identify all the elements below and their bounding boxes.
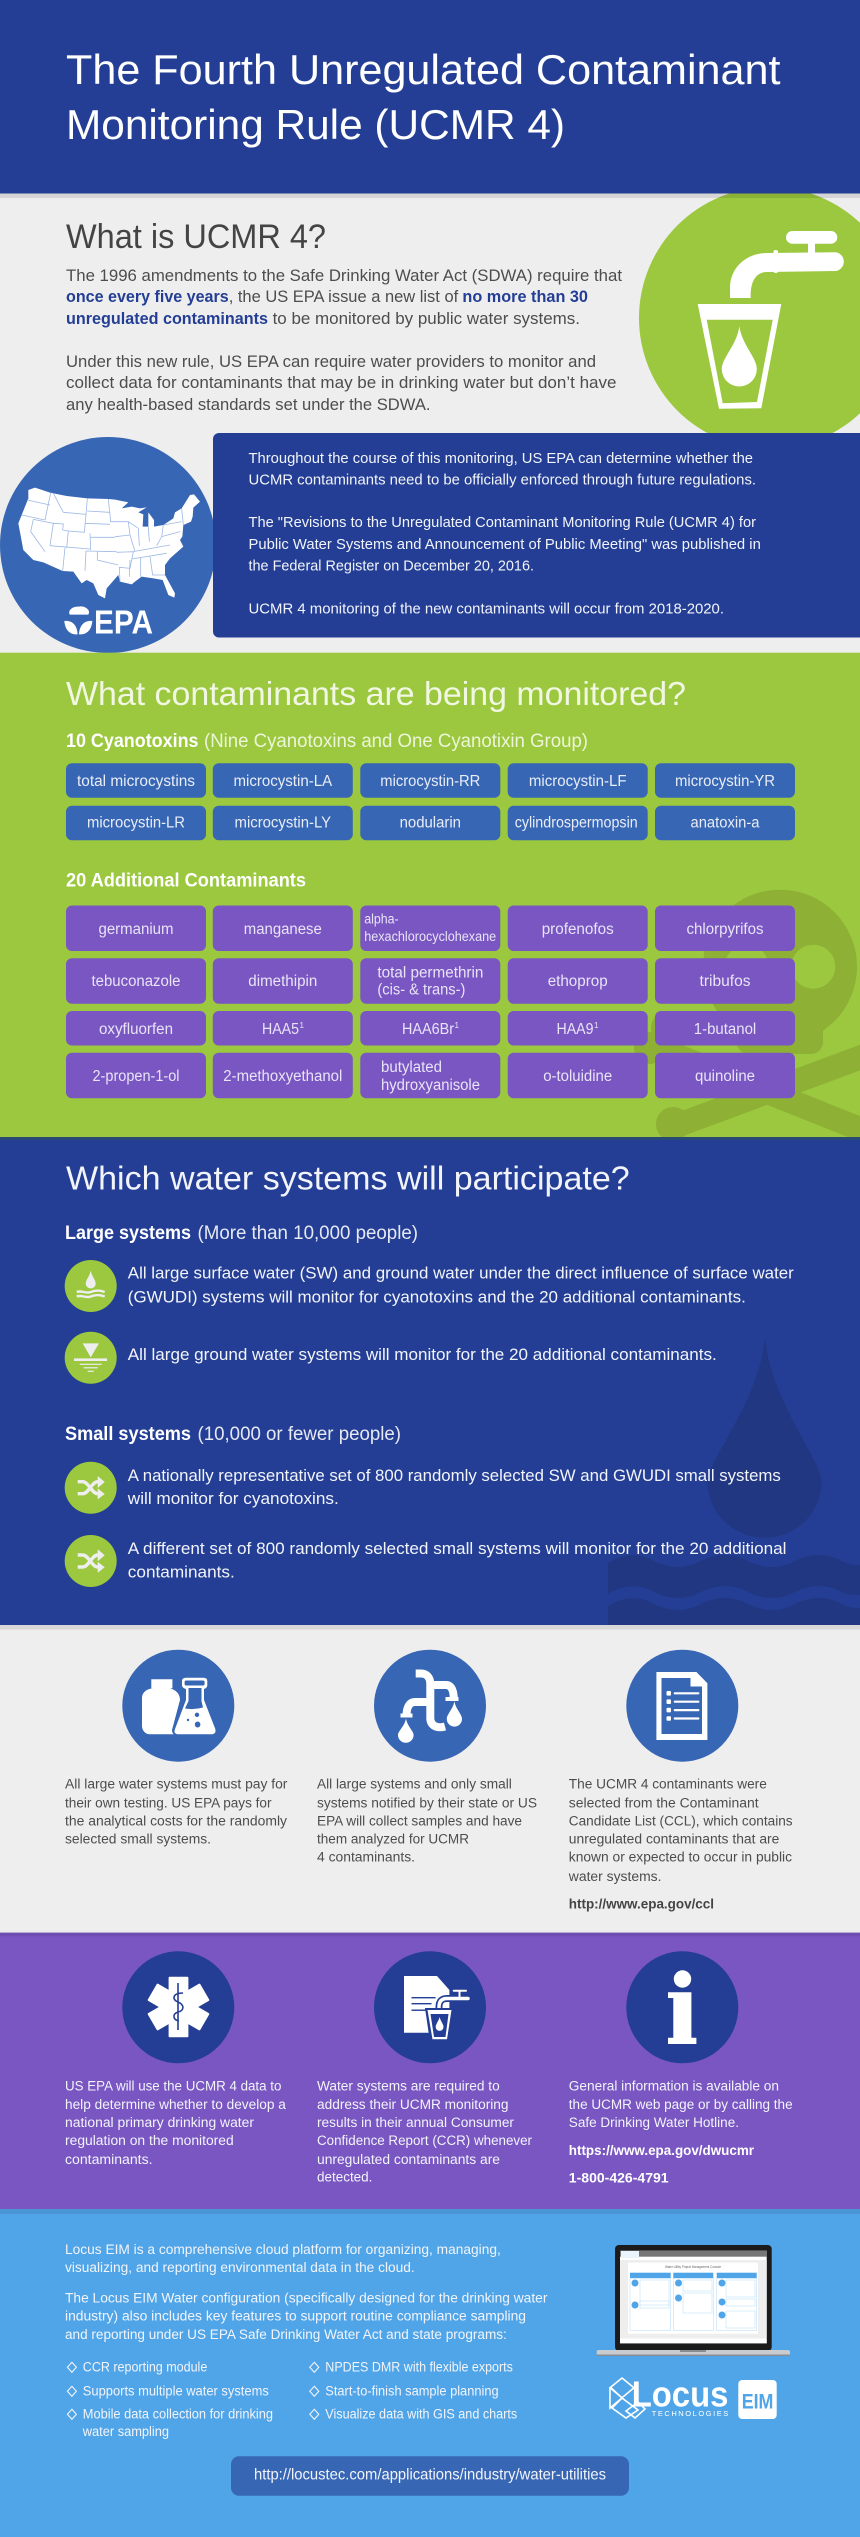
icon: US map and EPA logo on blue circle bbox=[0, 437, 216, 653]
image: laptop with Locus console: Water Utility Project Management Console bbox=[665, 2265, 721, 2269]
chips: cyanotoxins: microcystin-LA bbox=[233, 773, 333, 790]
text: consumer confidence report: address their UCMR monitoring bbox=[317, 2097, 508, 2113]
text: Locus EIM intro: The Locus EIM Water configuration (specifically designed for the drinking water bbox=[65, 2291, 548, 2307]
link button: water utilities bbox=[231, 2456, 629, 2496]
chips: cyanotoxins: anatoxin-a bbox=[690, 815, 760, 832]
text: consumer confidence report: results in their annual Consumer bbox=[317, 2115, 514, 2131]
chips: additional contaminants: oxyfluorfen bbox=[99, 1021, 173, 1038]
text: large surface water: (GWUDI) systems will monitor for cyanotoxins and the 20 additional contaminants. bbox=[128, 1289, 746, 1307]
text: testing costs: their own testing. US EPA pays for bbox=[65, 1796, 272, 1812]
chips: cyanotoxins bbox=[66, 763, 795, 840]
text: small systems cyanotoxins bbox=[127, 1467, 781, 1508]
text: consumer confidence report: Confidence Report (CCR) whenever bbox=[317, 2133, 532, 2149]
text: contaminant candidate list: water systems. bbox=[568, 1869, 662, 1885]
icon: shuffle bbox=[65, 1462, 117, 1514]
chips: additional contaminants: ethoprop bbox=[548, 973, 608, 990]
panel: what is UCMR 4 bbox=[0, 187, 860, 653]
text: testing costs: selected small systems. bbox=[65, 1832, 211, 1848]
chips: additional contaminants: HAA9 bbox=[556, 1021, 594, 1038]
text: consumer confidence report: unregulated contaminants are bbox=[317, 2152, 500, 2168]
text: who collects samples: 4 contaminants. bbox=[317, 1850, 415, 1866]
text: contaminant candidate list: http://www.epa.gov/ccl bbox=[569, 1897, 714, 1913]
text: Locus EIM intro: and reporting under US EPA Safe Drinking Water Act and state programs: bbox=[65, 2327, 507, 2343]
text: general information bbox=[569, 2079, 793, 2187]
text: general information: General information is available on bbox=[569, 2079, 779, 2095]
text: Locus EIM intro: visualizing, and reporting environmental data in the cloud. bbox=[65, 2260, 415, 2276]
chips: cyanotoxins: microcystin-LR bbox=[87, 815, 185, 832]
chips: cyanotoxins: microcystin-YR bbox=[675, 773, 775, 790]
text: who collects samples: EPA will collect samples and have bbox=[317, 1814, 522, 1830]
list: features: water sampling bbox=[82, 2424, 169, 2440]
chips: additional contaminants: alpha- bbox=[364, 911, 399, 926]
chips: additional contaminants: total permethrin bbox=[377, 964, 483, 981]
text: who collects samples: systems notified by their state or US bbox=[317, 1796, 537, 1812]
text: who collects samples: them analyzed for UCMR bbox=[317, 1832, 469, 1848]
text: contaminant candidate list: The UCMR 4 contaminants were bbox=[569, 1777, 767, 1793]
chips: additional contaminants: 2-methoxyethanol bbox=[223, 1068, 342, 1085]
text block: rule paragraph: any health-based standards set under the SDWA. bbox=[66, 396, 430, 414]
chips: cyanotoxins: microcystin-RR bbox=[380, 773, 480, 790]
text: contaminant candidate list: selected from the Contaminant bbox=[569, 1796, 759, 1812]
icon: US map and EPA logo on blue circle: EPA bbox=[94, 604, 153, 640]
text: small systems cyanotoxins: A nationally representative set of 800 randomly selected SW and GWUDI small systems bbox=[128, 1467, 781, 1485]
text: consumer confidence report bbox=[317, 2079, 532, 2186]
text block: intro paragraph: no more than 30 bbox=[462, 288, 588, 306]
panel: monitoring details: Public Water Systems and Announcement of Public Meeting" was published in bbox=[248, 537, 761, 553]
chips: additional contaminants: dimethipin bbox=[248, 973, 317, 990]
subheading: cyanotoxins: (Nine Cyanotoxins and One Cyanotixin Group) bbox=[204, 731, 588, 752]
list: features: NPDES DMR with flexible exports bbox=[325, 2360, 513, 2376]
text: testing costs bbox=[65, 1777, 288, 1848]
panel: monitoring details bbox=[213, 433, 860, 638]
panel: monitoring details: UCMR 4 monitoring of the new contaminants will occur from 2018-2020. bbox=[248, 602, 724, 618]
text: Locus EIM intro: industry) also includes key features to support routine compliance sampling bbox=[65, 2309, 526, 2325]
list: features: Start-to-finish sample planning bbox=[325, 2384, 499, 2400]
chips: additional contaminants: HAA6Br bbox=[402, 1021, 454, 1038]
text block: intro paragraph bbox=[66, 267, 622, 328]
panel: monitoring details: The "Revisions to the Unregulated Contaminant Monitoring Rule (UCMR 4) for bbox=[248, 515, 756, 531]
icon: report with faucet and glass bbox=[374, 1951, 486, 2063]
subheading: additional contaminants: 20 Additional Contaminants bbox=[66, 871, 306, 892]
icon: document checklist bbox=[626, 1650, 738, 1762]
text: EPA use of data: US EPA will use the UCMR 4 data to bbox=[65, 2079, 282, 2095]
icon: pipes with drops bbox=[374, 1650, 486, 1762]
icon: star of life bbox=[122, 1951, 234, 2063]
list: features: Mobile data collection for drinking bbox=[83, 2407, 273, 2423]
icon: ground water bbox=[65, 1332, 117, 1384]
chips: additional contaminants: hexachlorocyclohexane bbox=[364, 929, 496, 944]
panel: monitoring details: the Federal Register on December 20, 2016. bbox=[248, 558, 534, 574]
text: who collects samples: All large systems and only small bbox=[317, 1777, 512, 1793]
subheading: small systems: Small systems bbox=[65, 1424, 191, 1445]
title: Monitoring Rule (UCMR 4) bbox=[66, 101, 565, 148]
text: testing costs: All large water systems must pay for bbox=[65, 1777, 288, 1793]
chips: additional contaminants: tribufos bbox=[700, 973, 751, 990]
list: features: Visualize data with GIS and charts bbox=[325, 2407, 517, 2423]
panel: which water systems will participate bbox=[0, 1137, 860, 1625]
icon: water drop and waves watermark bbox=[608, 1337, 860, 1625]
text: consumer confidence report: Water systems are required to bbox=[317, 2079, 500, 2095]
text: contaminant candidate list: known or expected to occur in public bbox=[569, 1850, 792, 1866]
icon: information bbox=[626, 1951, 738, 2063]
chips: additional contaminants: o-toluidine bbox=[543, 1068, 612, 1085]
text: large surface water bbox=[128, 1265, 794, 1307]
chips: additional contaminants: 1-butanol bbox=[694, 1021, 756, 1038]
panel: contaminants being monitored bbox=[0, 653, 860, 1141]
chips: additional contaminants: tebuconazole bbox=[92, 973, 180, 990]
text: contaminant candidate list bbox=[568, 1777, 793, 1913]
chips: cyanotoxins: nodularin bbox=[400, 815, 461, 832]
text: general information: 1-800-426-4791 bbox=[569, 2171, 669, 2187]
icon: faucet and glass on green circle bbox=[639, 187, 860, 449]
title: The Fourth Unregulated Contaminant bbox=[66, 46, 781, 93]
subheading: large systems: (More than 10,000 people) bbox=[198, 1223, 418, 1244]
text: EPA use of data: regulation on the monitored bbox=[65, 2133, 234, 2149]
text: large surface water: All large surface water (SW) and ground water under the direct influence of surface water bbox=[128, 1265, 794, 1283]
chips: cyanotoxins: microcystin-LY bbox=[235, 815, 331, 832]
chips: additional contaminants: chlorpyrifos bbox=[686, 921, 764, 938]
heading: contaminants: What contaminants are being monitored? bbox=[66, 675, 686, 712]
chips: additional contaminants: germanium bbox=[98, 921, 174, 938]
image: laptop with Locus console bbox=[597, 2245, 790, 2356]
chips: additional contaminants: 1 bbox=[594, 1021, 599, 1030]
text block: intro paragraph: The 1996 amendments to the Safe Drinking Water Act (SDWA) require that bbox=[66, 267, 622, 285]
panel: monitoring details: UCMR contaminants need to be officially enforced through future regulations. bbox=[248, 472, 756, 488]
chips: additional contaminants: 1 bbox=[300, 1021, 304, 1030]
panel: monitoring details: Throughout the course of this monitoring, US EPA can determine whether the bbox=[248, 451, 753, 467]
logo: EIM badge bbox=[738, 2380, 777, 2419]
text block: intro paragraph: to be monitored by public water systems. bbox=[273, 310, 580, 328]
chips: additional contaminants: quinoline bbox=[695, 1068, 755, 1085]
chips: cyanotoxins: total microcystins bbox=[77, 773, 195, 790]
text: small systems cyanotoxins: will monitor for cyanotoxins. bbox=[127, 1490, 339, 1508]
chips: additional contaminants bbox=[66, 906, 795, 1098]
subheading: large systems: Large systems bbox=[65, 1223, 191, 1244]
chips: additional contaminants: hydroxyanisole bbox=[381, 1077, 480, 1094]
subheading: small systems: (10,000 or fewer people) bbox=[198, 1424, 401, 1445]
panel: Locus EIM bbox=[0, 2209, 860, 2537]
icon: surface water bbox=[65, 1260, 117, 1312]
chips: additional contaminants: butylated bbox=[381, 1059, 442, 1076]
icon: skull and crossbones watermark bbox=[634, 890, 860, 1141]
text: consumer confidence report: detected. bbox=[317, 2170, 372, 2186]
text block: intro paragraph: unregulated contaminants bbox=[66, 310, 268, 328]
heading: what is UCMR 4: What is UCMR 4? bbox=[66, 218, 326, 256]
text: EPA use of data bbox=[65, 2079, 286, 2168]
icon: shuffle bbox=[65, 1535, 117, 1587]
text block: rule paragraph: Under this new rule, US EPA can require water providers to monitor and bbox=[66, 353, 596, 371]
logo: EIM badge: EIM bbox=[742, 2390, 773, 2413]
subheading: cyanotoxins: 10 Cyanotoxins bbox=[66, 731, 198, 752]
logo: Locus Technologies: TECHNOLOGIES bbox=[652, 2409, 728, 2418]
text: general information: https://www.epa.gov/dwucmr bbox=[569, 2143, 754, 2159]
heading: participation: Which water systems will participate? bbox=[66, 1159, 630, 1196]
subheading: large systems bbox=[65, 1223, 418, 1244]
chips: additional contaminants: profenofos bbox=[542, 921, 614, 938]
text: contaminant candidate list: unregulated contaminants that are bbox=[569, 1832, 779, 1848]
subheading: small systems bbox=[65, 1424, 401, 1445]
header banner bbox=[0, 0, 860, 194]
chips: additional contaminants: (cis- & trans-) bbox=[377, 981, 465, 998]
text block: rule paragraph bbox=[66, 353, 616, 414]
text: EPA use of data: contaminants. bbox=[65, 2152, 152, 2168]
text: EPA use of data: national primary drinking water bbox=[65, 2115, 254, 2131]
text: small systems additional contaminants: contaminants. bbox=[128, 1564, 235, 1582]
text: testing costs: the analytical costs for the randomly bbox=[65, 1814, 288, 1830]
text: large ground water: All large ground water systems will monitor for the 20 additional contaminants. bbox=[128, 1346, 717, 1364]
panel: testing facts bbox=[0, 1625, 860, 1933]
chips: additional contaminants: 1 bbox=[454, 1021, 460, 1030]
text: general information: the UCMR web page or by calling the bbox=[569, 2097, 793, 2113]
list: features: CCR reporting module bbox=[83, 2360, 207, 2376]
text block: intro paragraph: , the US EPA issue a new list of bbox=[229, 288, 459, 306]
text: who collects samples bbox=[317, 1777, 537, 1866]
chips: additional contaminants: manganese bbox=[244, 921, 322, 938]
text: general information: Safe Drinking Water Hotline. bbox=[569, 2115, 739, 2131]
title bbox=[66, 46, 781, 148]
list: features bbox=[67, 2360, 517, 2440]
text: EPA use of data: help determine whether to develop a bbox=[65, 2097, 286, 2113]
list: features: Supports multiple water systems bbox=[83, 2384, 269, 2400]
chips: cyanotoxins: cylindrospermopsin bbox=[515, 815, 638, 832]
chips: additional contaminants: 2-propen-1-ol bbox=[92, 1068, 180, 1085]
text: contaminant candidate list: Candidate List (CCL), which contains bbox=[569, 1814, 793, 1830]
text: Locus EIM intro: Locus EIM is a comprehensive cloud platform for organizing, managing, bbox=[65, 2242, 501, 2258]
chips: additional contaminants: HAA5 bbox=[262, 1021, 299, 1038]
text: small systems additional contaminants bbox=[128, 1540, 787, 1582]
chips: cyanotoxins: microcystin-LF bbox=[529, 773, 626, 790]
text: small systems additional contaminants: A different set of 800 randomly selected small systems will monitor for the 20 additional bbox=[128, 1540, 787, 1558]
icon: bottle and flask bbox=[122, 1650, 234, 1762]
text: Locus EIM intro bbox=[65, 2242, 548, 2343]
text block: intro paragraph: once every five years bbox=[66, 288, 229, 306]
text block: rule paragraph: collect data for contaminants that may be in drinking water but don’t have bbox=[66, 374, 616, 392]
link button: water utilities: http://locustec.com/applications/industry/water-utilities bbox=[254, 2466, 606, 2483]
logo: Locus Technologies: Locus bbox=[632, 2374, 728, 2415]
panel: regulation and reporting bbox=[0, 1933, 860, 2209]
